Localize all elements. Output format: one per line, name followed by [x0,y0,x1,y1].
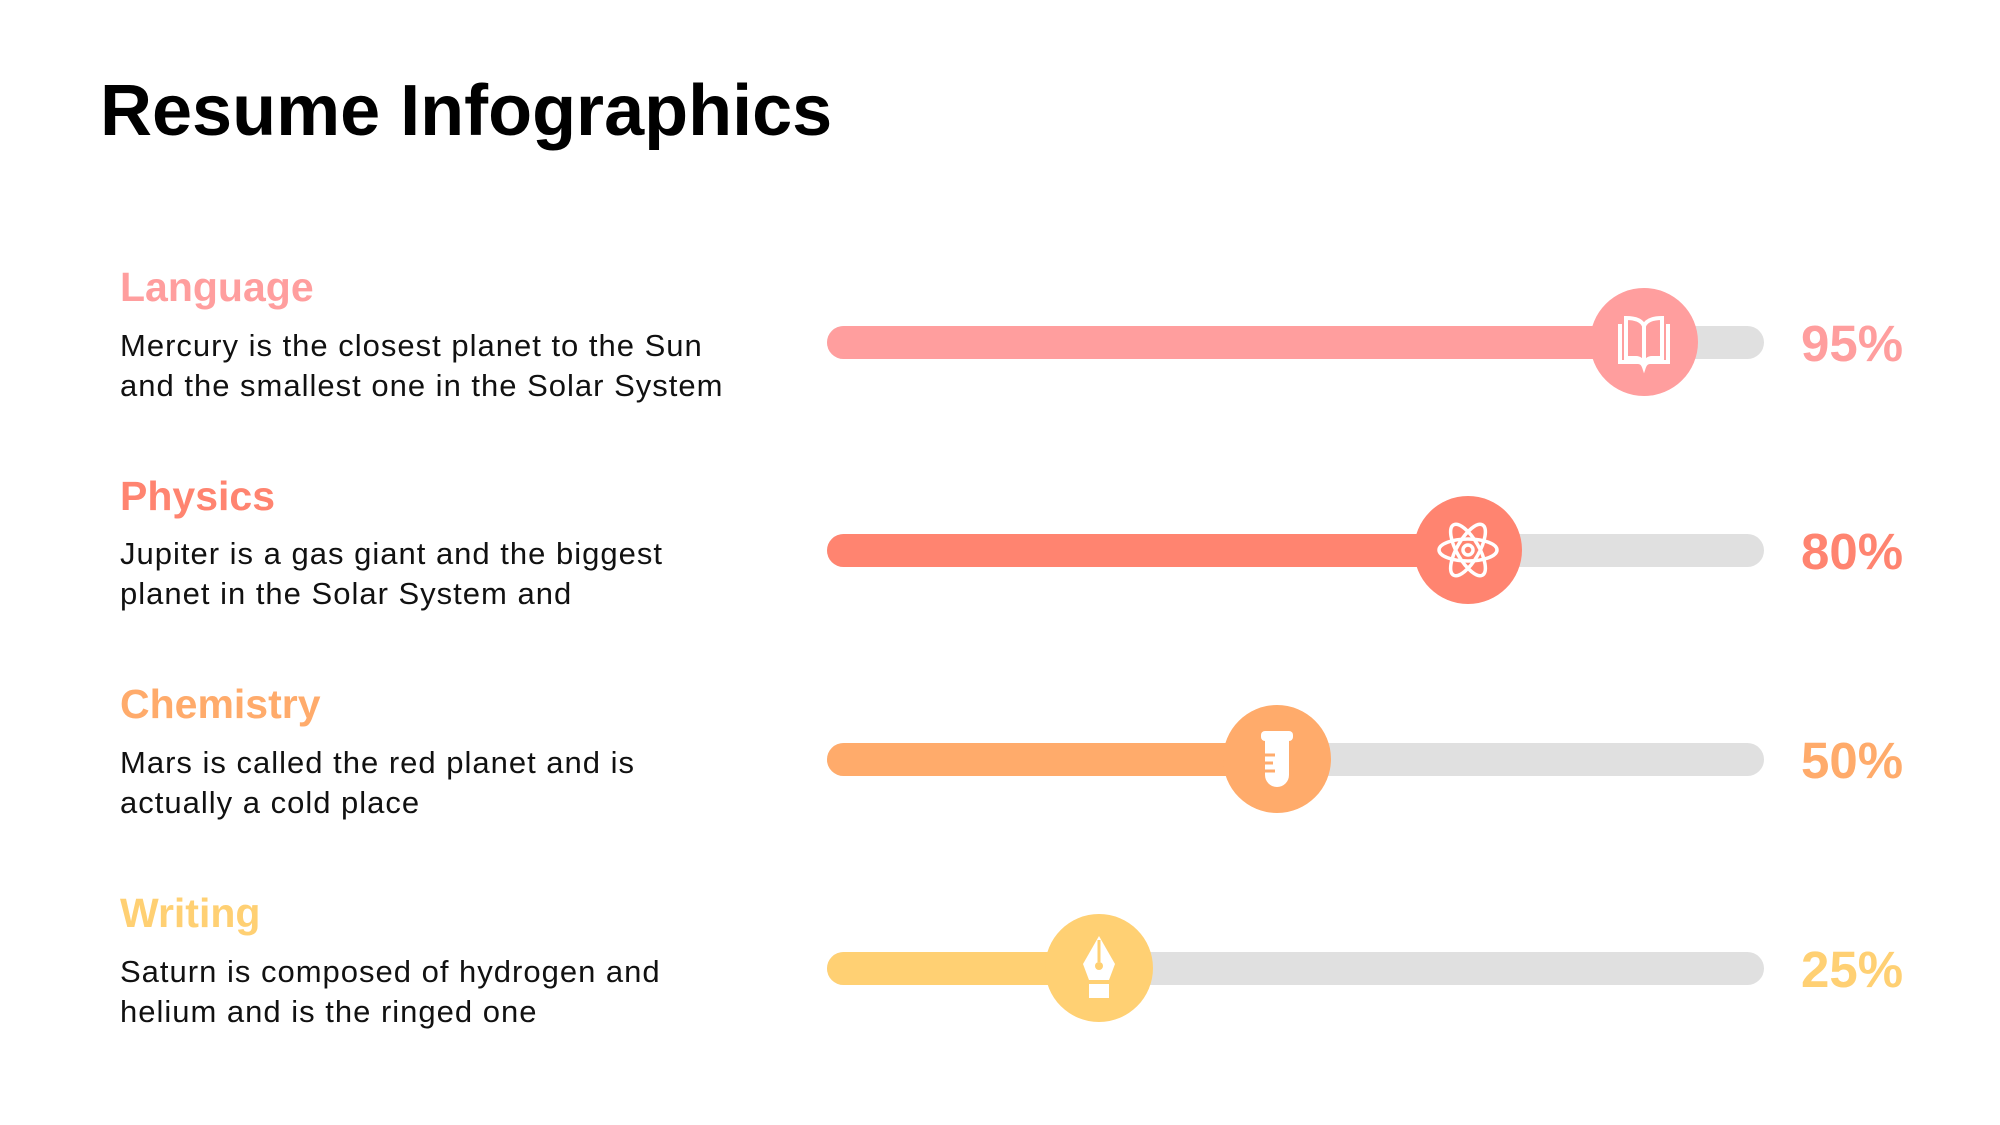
text: language [120,328,723,402]
text: physics: Jupiter is a gas giant and the biggest [120,536,663,571]
text: chemistry: actually a cold place [120,784,420,820]
row: writing [120,890,1903,1028]
text: writing: Saturn is composed of hydrogen and [120,954,661,989]
text: chemistry: Mars is called the red planet and is [120,745,635,780]
icon: atom [1414,496,1522,604]
percent: 25: 25% [1801,941,1903,998]
icon: pen nib [1045,914,1153,1022]
text: physics [120,536,663,610]
heading: language: Language [120,264,314,310]
text: language: and the smallest one in the Solar System [120,368,723,402]
bar: language 95% [827,326,1764,359]
text: physics: planet in the Solar System and [120,576,572,610]
bar: writing 25% [827,952,1764,985]
row: language [120,264,1903,402]
icon: test tube [1223,705,1331,813]
text: chemistry [120,745,635,820]
row: physics [120,473,1903,610]
heading: chemistry: Chemistry [120,681,321,727]
text: writing [120,954,661,1028]
icon: book [1590,288,1698,396]
heading: writing: Writing [120,890,260,936]
title: Resume Infographics [100,71,832,151]
row: chemistry [120,681,1903,820]
bar: physics 80% [827,534,1764,567]
percent: 50: 50% [1801,732,1903,789]
heading: physics: Physics [120,473,275,519]
text: writing: helium and is the ringed one [120,994,537,1028]
text: language: Mercury is the closest planet to the Sun [120,328,703,363]
bar: chemistry 50% [827,743,1764,776]
percent: 95: 95% [1801,315,1903,372]
percent: 80: 80% [1801,523,1903,580]
